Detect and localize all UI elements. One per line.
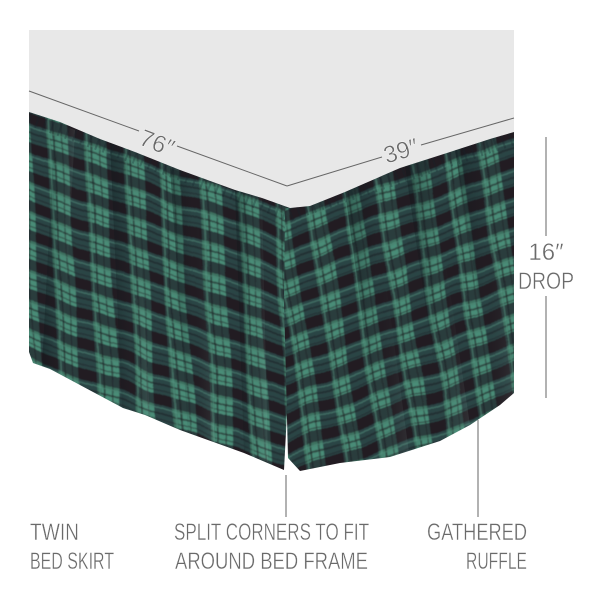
label: 16: 16″ — [528, 239, 564, 266]
label: drop: DROP — [518, 268, 574, 295]
dimension: 76 inch length — [29, 91, 287, 186]
dimension: 16 inch drop — [518, 137, 574, 398]
caption: gathered ruffle — [427, 519, 527, 575]
caption: twin bed skirt — [30, 519, 114, 575]
caption: gathered ruffle: RUFFLE — [466, 548, 527, 575]
gathers: long side — [29, 118, 290, 214]
dimension: 39 inch width — [287, 118, 514, 186]
bed skirt: long side panel — [29, 112, 290, 470]
fold shading: short side — [345, 142, 514, 460]
caption: split corners: AROUND BED FRAME — [175, 548, 368, 575]
caption: split corners — [174, 519, 369, 575]
caption: gathered ruffle: GATHERED — [427, 519, 527, 546]
gathers: short side — [290, 138, 514, 214]
fold shading: long side — [42, 122, 268, 462]
label: 76: 76″ — [136, 125, 179, 163]
pointer: split corners — [285, 475, 287, 517]
caption: twin bed skirt: BED SKIRT — [30, 548, 114, 575]
caption: twin bed skirt: TWIN — [30, 519, 79, 546]
caption: split corners: SPLIT CORNERS TO FIT — [174, 519, 369, 546]
pointer: gathered ruffle — [477, 420, 479, 517]
bed mattress top — [29, 30, 514, 220]
label: 39: 39″ — [380, 133, 422, 170]
bed skirt: short side panel — [284, 132, 514, 471]
